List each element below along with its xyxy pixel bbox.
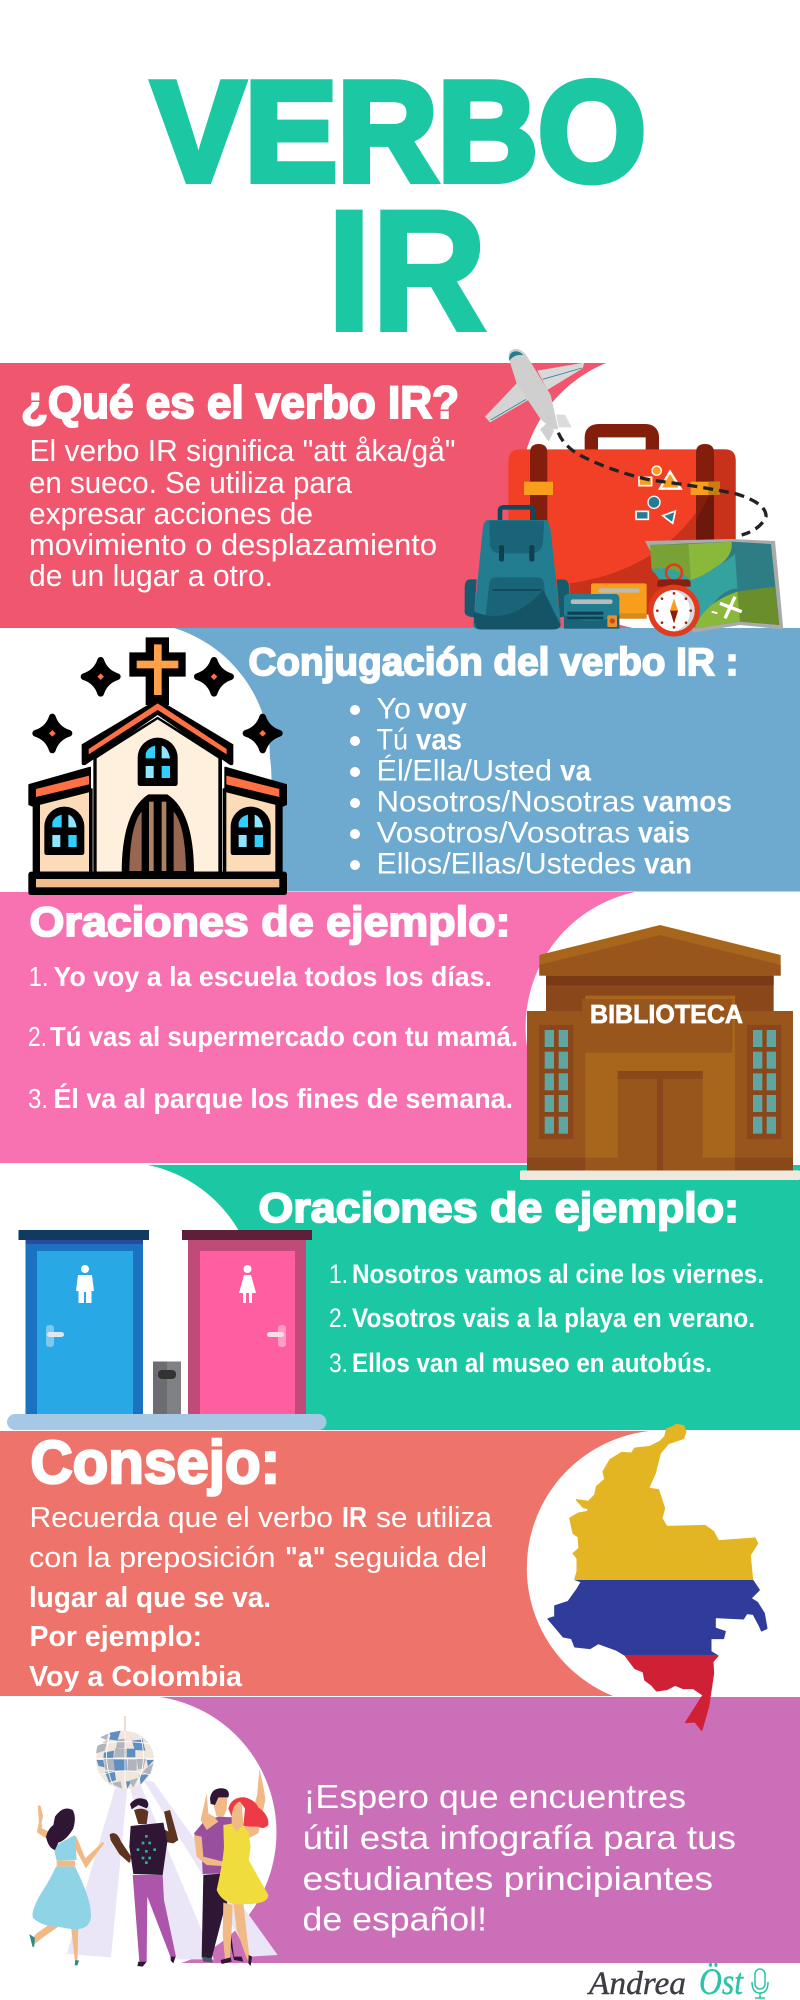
text block: tip: se utiliza: [376, 1502, 493, 1534]
text block: closing: ¡Espero que encuentres: [304, 1779, 686, 1816]
bulleted list: conjugation: vamos: [643, 786, 732, 818]
icon: wallet: [564, 594, 619, 629]
heading: conjugacion: Conjugación del verbo IR :: [248, 641, 738, 684]
icon: couple dancing: [194, 1769, 268, 1966]
logo: Andrea Öst: [587, 1962, 768, 2000]
numbered list: sentences 4-6: Vosotros vais a la playa en verano.: [352, 1303, 755, 1333]
text block: definition: de un lugar a otro.: [29, 558, 273, 593]
text block: closing: de español!: [302, 1902, 487, 1938]
numbered list: sentences 1-3: Él va al parque los fines de semana.: [54, 1083, 513, 1114]
text block: closing: útil esta infografía para tus: [302, 1820, 736, 1857]
heading: oraciones 2: Oraciones de ejemplo:: [258, 1184, 739, 1231]
panel: oraciones de ejemplo 1: [0, 892, 800, 1165]
library sign: BIBLIOTECA: [590, 999, 743, 1029]
bulleted list: conjugation: vas: [416, 724, 462, 756]
arrow: dashed flight path: [558, 433, 766, 535]
bulleted list: conjugation: [350, 692, 732, 880]
text block: tip: Por ejemplo:: [30, 1621, 202, 1653]
numbered list: sentences 1-3: Tú vas al supermercado con tu mamá.: [50, 1021, 518, 1052]
icon: side wings: [29, 768, 286, 875]
numbered list: sentences 4-6: 3.: [329, 1348, 348, 1378]
icon: disco ball: [96, 1716, 154, 1789]
icon: bin: [153, 1362, 181, 1416]
icon: pink door: [182, 1230, 312, 1415]
icon: library left window: [539, 1025, 573, 1139]
numbered list: sentences 1-3: [28, 961, 518, 1114]
numbered list: sentences 1-3: 3.: [28, 1083, 48, 1114]
illustration: church: [28, 637, 287, 895]
numbered list: sentences 1-3: 1.: [28, 961, 48, 992]
numbered list: sentences 1-3: Yo voy a la escuela todos los días.: [54, 961, 492, 992]
heading: oraciones 1: Oraciones de ejemplo:: [30, 898, 510, 945]
panel: closing message: [0, 1697, 800, 1963]
icon: orange card: [591, 583, 647, 619]
icon: library right window: [747, 1025, 781, 1139]
text block: tip: Recuerda que el verbo: [30, 1502, 333, 1534]
text block: tip: Voy a Colombia: [29, 1661, 243, 1693]
numbered list: sentences 4-6: Ellos van al museo en autobús.: [352, 1348, 712, 1378]
icon: library roof: [539, 925, 781, 1012]
illustration: dancers: [31, 1716, 278, 1967]
text block: definition: en sueco. Se utiliza para: [29, 465, 353, 500]
numbered list: sentences 4-6: 2.: [329, 1303, 348, 1333]
text block: definition: movimiento o desplazamiento: [29, 527, 437, 562]
illustration: library building: [520, 925, 800, 1180]
icon: airplane: [485, 349, 584, 442]
illustration: colombia flag map: [548, 1425, 767, 1730]
bulleted list: conjugation: Nosotros/Nosotras: [376, 786, 635, 818]
icon: sparkles: [36, 660, 279, 750]
text block: tip: IR: [342, 1502, 367, 1534]
icon: suitcase: [508, 431, 736, 614]
icon: floor: [7, 1414, 326, 1430]
illustration: travel items: [465, 349, 783, 637]
heading: que es: ¿Qué es el verbo IR?: [21, 377, 459, 428]
bulleted list: conjugation: voy: [418, 692, 467, 726]
numbered list: sentences 1-3: 2.: [28, 1021, 47, 1052]
title: [152, 52, 646, 367]
text block: tip: con la preposición: [29, 1542, 276, 1574]
text block: tip: lugar al que se va.: [29, 1582, 271, 1614]
bulleted list: conjugation: Tú: [376, 724, 408, 756]
illustration: restroom doors: [7, 1230, 326, 1430]
numbered list: sentences 4-6: [329, 1259, 764, 1378]
icon: blue door: [18, 1230, 149, 1415]
bulleted list: conjugation: va: [560, 754, 591, 788]
icon: main wall and roof: [82, 699, 233, 875]
bulleted list: conjugation: Él/Ella/Usted: [376, 754, 552, 788]
bulleted list: conjugation: Ellos/Ellas/Ustedes: [376, 848, 636, 880]
panel: que es el verbo IR: [0, 363, 800, 628]
panel: oraciones de ejemplo 2: [0, 1165, 800, 1430]
icon: backpack: [465, 507, 569, 629]
text block: tip: seguida del: [334, 1542, 487, 1574]
title: IR: [327, 175, 487, 367]
icon: compass: [648, 565, 700, 637]
text block: definition: El verbo IR significa "att åka/gå": [30, 433, 456, 468]
icon: library body: [527, 996, 793, 1170]
icon: microphone: [752, 1969, 768, 1998]
text block: closing: estudiantes principiantes: [302, 1861, 713, 1898]
icon: cross: [129, 637, 186, 705]
icon: church base: [28, 872, 287, 895]
text block: definition: expresar acciones de: [29, 496, 313, 531]
numbered list: sentences 4-6: Nosotros vamos al cine los viernes.: [352, 1259, 764, 1289]
text block: tip: [29, 1502, 493, 1693]
bulleted list: conjugation: vais: [638, 816, 690, 850]
icon: folded map: [645, 539, 783, 633]
bulleted list: conjugation: Yo: [376, 692, 411, 726]
icon: church door: [122, 794, 194, 873]
heading: consejo: Consejo:: [30, 1429, 280, 1496]
text block: definition: [29, 433, 456, 593]
text block: tip: "a": [285, 1542, 326, 1574]
title: VERBO: [152, 52, 646, 212]
bulleted list: conjugation: van: [644, 848, 692, 880]
numbered list: sentences 4-6: 1.: [329, 1259, 348, 1289]
bulleted list: conjugation: Vosotros/Vosotras: [376, 816, 630, 850]
text block: closing: [302, 1779, 736, 1938]
panel: consejo: [0, 1429, 800, 1696]
icon: library base: [520, 1170, 800, 1180]
panel: conjugacion: [0, 628, 800, 892]
icon: man in black shirt: [111, 1798, 178, 1967]
icon: woman in blue dress: [31, 1807, 103, 1965]
icon: church windows: [44, 738, 271, 855]
icon: light beams: [67, 1780, 278, 1959]
